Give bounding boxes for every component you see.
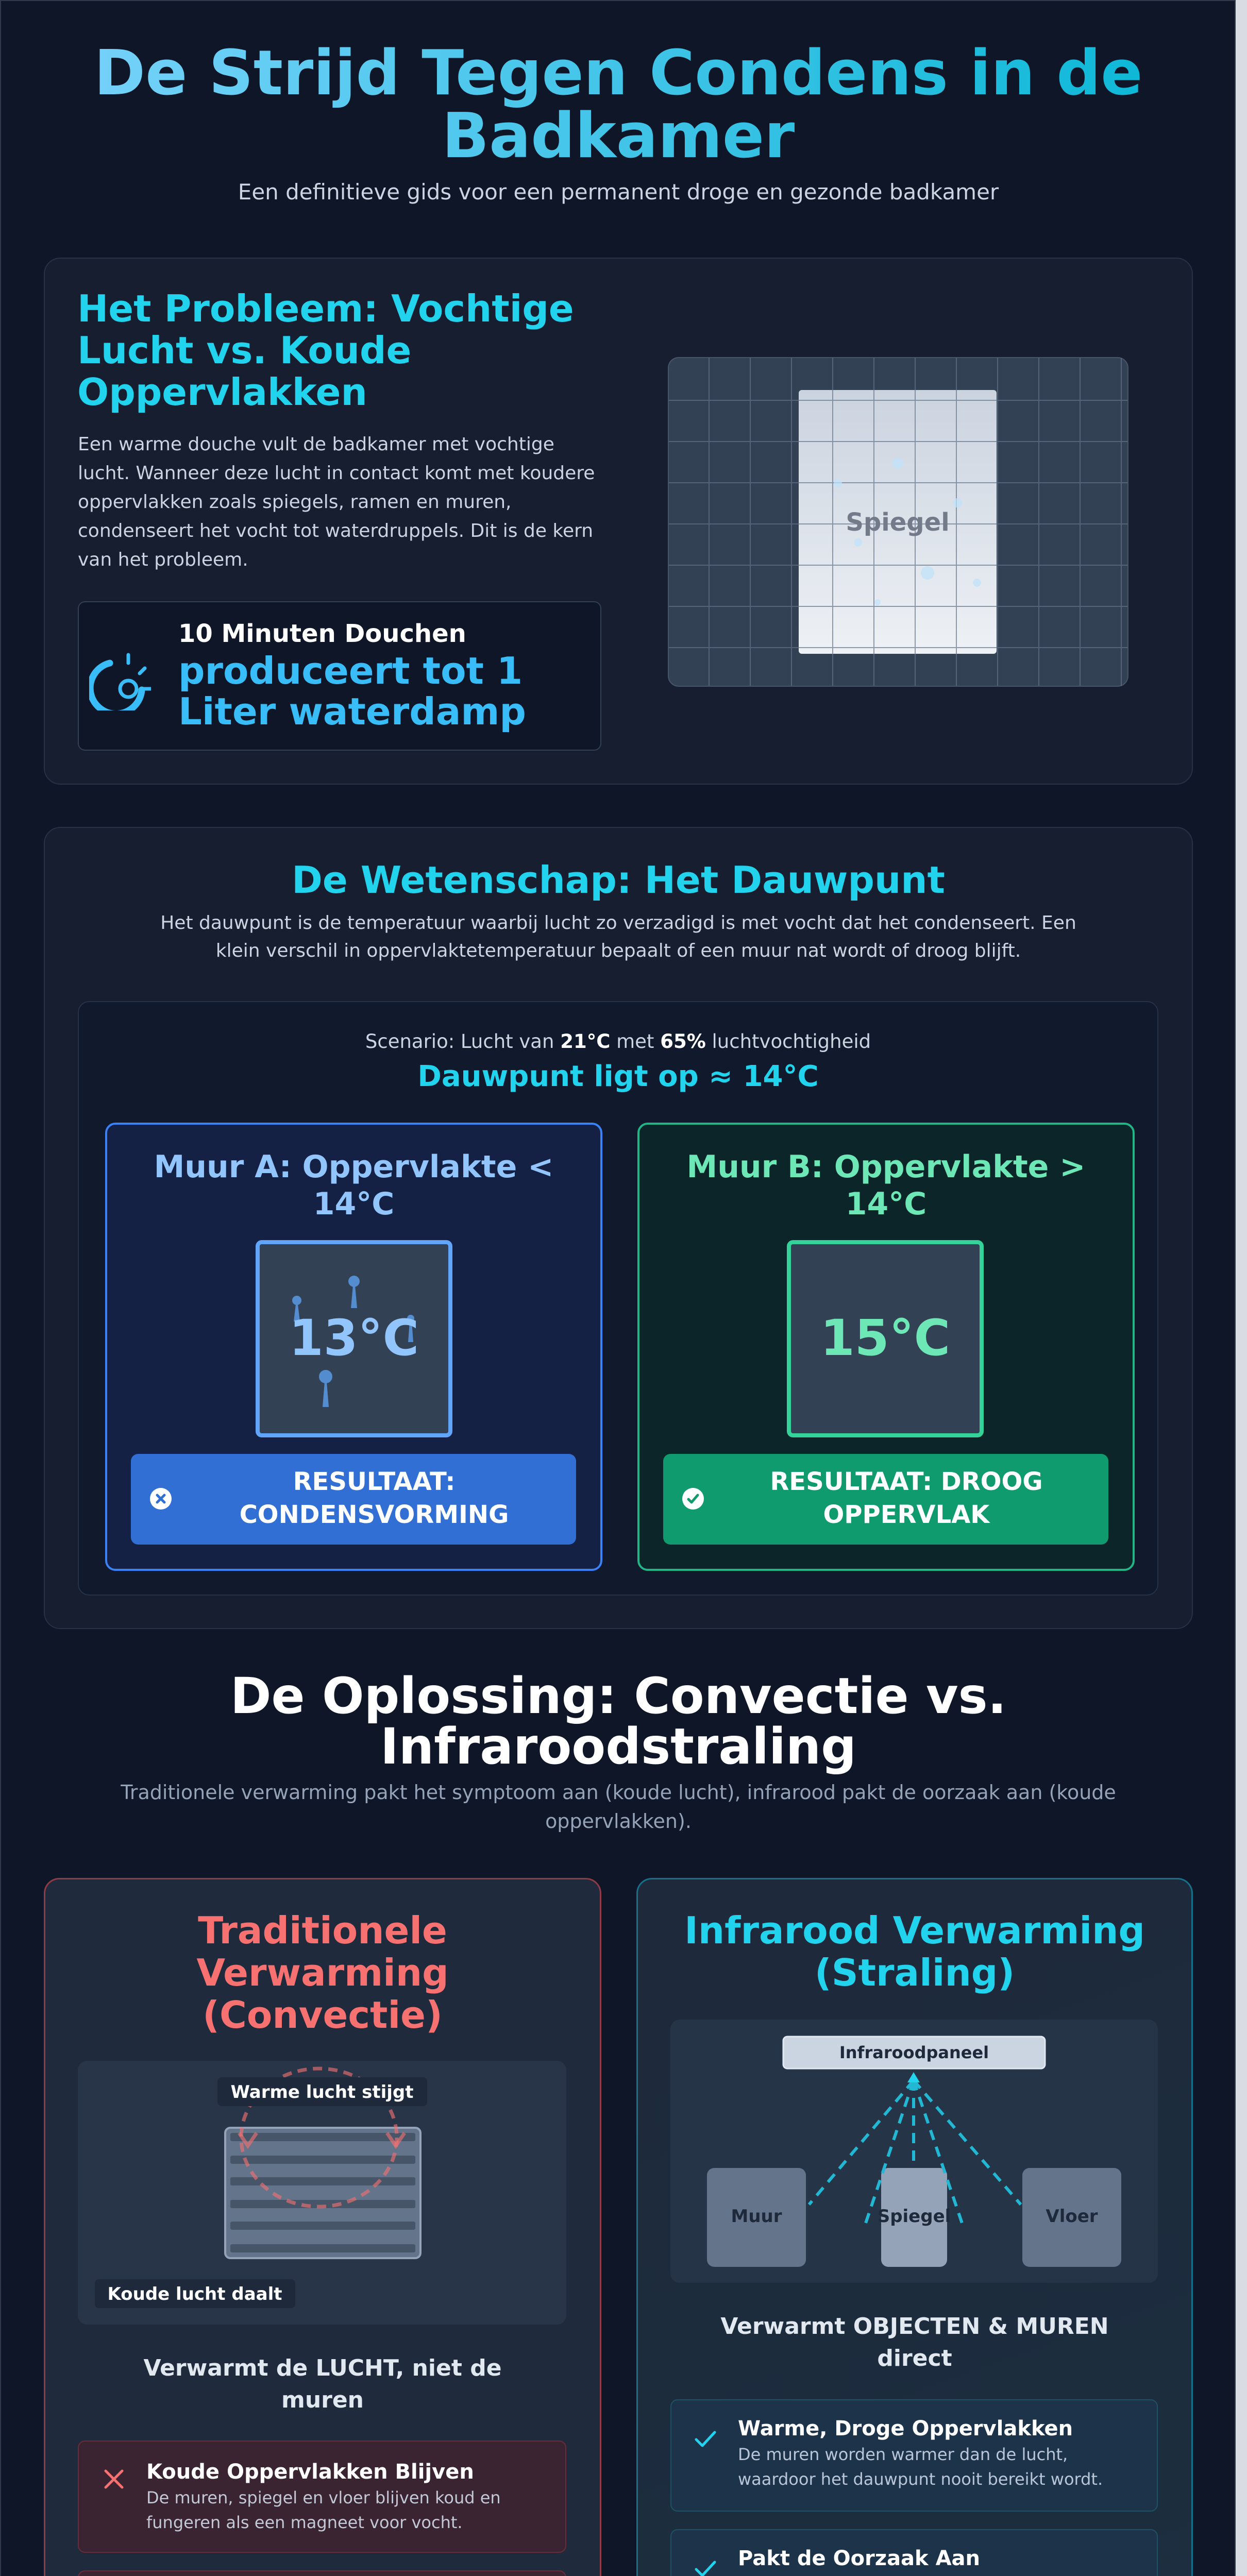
diagram: straling: Infraroodpaneel — [839, 2043, 989, 2062]
illustration: mirror on tiles: Spiegel — [846, 508, 950, 537]
card title A — [154, 1149, 553, 1222]
diagram: convectie: Koude lucht daalt — [107, 2284, 282, 2304]
heading: oplossing — [230, 1667, 1006, 1775]
objects — [707, 2168, 806, 2267]
title: traditioneel: Traditionele — [198, 1909, 447, 1952]
result text A: CONDENSVORMING — [240, 1500, 509, 1529]
caption: objecten: Verwarmt OBJECTEN & MUREN — [720, 2313, 1109, 2340]
item: warme oppervlakken: Warme, Droge Oppervlakken — [738, 2417, 1073, 2441]
subtitle: oplossing: oppervlakken). — [545, 1810, 692, 1833]
item: warme oppervlakken: De muren worden warmer dan de lucht, — [738, 2445, 1068, 2464]
icon: check — [695, 2431, 716, 2447]
dauwpunt value: Dauwpunt ligt op ≈ 14°C — [417, 1060, 819, 1093]
item: luchtcirculatie — [78, 2570, 566, 2576]
subtitle: Een definitieve gids voor een permanent droge en gezonde badkamer — [238, 179, 999, 205]
caption: lucht: Verwarmt de LUCHT, niet de — [143, 2355, 502, 2381]
rays — [809, 2080, 1021, 2225]
caption: lucht — [143, 2355, 502, 2413]
result text B — [770, 1467, 1043, 1529]
icon: check — [695, 2561, 716, 2576]
wall square A with droplets — [256, 1240, 452, 1437]
icon: shower timer — [89, 653, 151, 710]
title: Badkamer — [442, 100, 795, 172]
result B — [663, 1454, 1108, 1545]
title: traditioneel: (Convectie) — [203, 1993, 443, 2037]
illustration: mirror on tiles — [668, 357, 1128, 687]
heading: dauwpunt: De Wetenschap: Het Dauwpunt — [292, 858, 945, 902]
text: probleem uitleg: Een warme douche vult de badkamer met vochtige — [78, 434, 554, 455]
diagram: straling — [670, 2020, 1158, 2283]
card: Muur B — [637, 1123, 1135, 1571]
subtitle: oplossing: Traditionele verwarming pakt het symptoom aan (koude lucht), infrarood pakt de oorzaak aan (koude — [121, 1781, 1116, 1804]
title: infrarood: Infrarood Verwarming — [684, 1909, 1145, 1952]
card title B: Muur B: Oppervlakte > — [686, 1149, 1086, 1185]
panel: probleem — [44, 258, 1193, 785]
title: traditioneel: Verwarming — [196, 1951, 449, 1994]
radiator — [225, 2128, 420, 2258]
text: probleem uitleg: oppervlakken zoals spiegels, ramen en muren, — [78, 492, 511, 513]
icon: x — [104, 2470, 124, 2488]
stat value — [178, 649, 526, 733]
item: warme oppervlakken: waardoor het dauwpunt nooit bereikt wordt. — [738, 2469, 1103, 2489]
label warm — [217, 2077, 427, 2106]
temperature A: 13°C — [289, 1309, 419, 1367]
item: warme oppervlakken — [670, 2399, 1158, 2512]
item: koude oppervlakken: De muren, spiegel en vloer blijven koud en — [146, 2488, 501, 2507]
result text B: OPPERVLAK — [823, 1500, 989, 1529]
item: koude oppervlakken — [78, 2441, 566, 2553]
caption: objecten: direct — [877, 2345, 952, 2371]
item: oorzaak: Pakt de Oorzaak Aan — [738, 2547, 980, 2570]
title: De Strijd Tegen Condens in de — [94, 38, 1142, 109]
convection loop — [241, 2069, 397, 2207]
result text B: RESULTAAT: DROOG — [770, 1467, 1043, 1496]
item: koude oppervlakken: fungeren als een magneet voor vocht. — [146, 2513, 463, 2532]
heading: oplossing: Infraroodstraling — [380, 1718, 856, 1775]
title — [0, 42, 1237, 168]
caption: objecten — [720, 2313, 1109, 2371]
stat value: produceert tot 1 — [178, 649, 523, 692]
title: infrarood: (Straling) — [815, 1951, 1015, 1994]
result text A — [240, 1467, 509, 1529]
subtitle: oplossing — [121, 1781, 1116, 1833]
temperature B: 15°C — [820, 1309, 950, 1367]
text: probleem uitleg — [78, 434, 595, 570]
text: uitleg dauwpunt — [160, 912, 1076, 961]
text: probleem uitleg: condenseert het vocht tot waterdruppels. Dit is de kern — [78, 520, 593, 541]
heading: probleem: Oppervlakken — [77, 370, 367, 414]
text: probleem uitleg: lucht. Wanneer deze lucht in contact komt met koudere — [78, 463, 595, 484]
diagram: straling: Spiegel — [878, 2206, 951, 2227]
stat label: 10 Minuten Douchen — [178, 619, 466, 648]
stat value: Liter waterdamp — [178, 690, 526, 733]
item: koude oppervlakken: Koude Oppervlakken Blijven — [146, 2460, 474, 2484]
card title A: Muur A: Oppervlakte < — [154, 1149, 553, 1185]
panel: traditionele verwarming — [44, 1878, 601, 2576]
title: traditioneel — [196, 1909, 449, 2037]
text: uitleg dauwpunt: Het dauwpunt is de temperatuur waarbij lucht zo verzadigd is met vocht dat het condenseert. Een — [160, 912, 1076, 934]
panel: wetenschap — [44, 827, 1193, 1629]
result A — [131, 1454, 576, 1545]
diagram: straling: Vloer — [1046, 2206, 1098, 2227]
wall square B — [787, 1240, 984, 1437]
heading: probleem: Het Probleem: Vochtige — [77, 287, 574, 330]
card title B — [686, 1149, 1086, 1222]
diagram: convectie: Warme lucht stijgt — [230, 2082, 414, 2103]
label koud — [95, 2279, 295, 2308]
caption: lucht: muren — [281, 2387, 364, 2413]
heading: probleem — [77, 287, 574, 414]
item: oorzaak — [670, 2529, 1158, 2576]
title: infrarood — [684, 1909, 1145, 1994]
icon: x circle — [150, 1488, 172, 1510]
text: probleem uitleg: van het probleem. — [78, 549, 248, 570]
heading: oplossing: De Oplossing: Convectie vs. — [230, 1667, 1006, 1725]
diagram: convectie — [78, 2061, 566, 2325]
icon: check circle — [682, 1488, 704, 1510]
panel: infrarood verwarming — [636, 1878, 1193, 2576]
stat box — [78, 601, 601, 751]
card title B: 14°C — [846, 1186, 926, 1222]
result text A: RESULTAAT: — [293, 1467, 455, 1496]
scenario line: Scenario: Lucht van 21°C met 65% luchtvochtigheid — [365, 1030, 871, 1053]
card title A: 14°C — [313, 1186, 394, 1222]
diagram: straling: Muur — [731, 2206, 782, 2227]
scenario box — [78, 1001, 1158, 1596]
card: Muur A — [105, 1123, 602, 1571]
heading: probleem: Lucht vs. Koude — [77, 329, 411, 372]
panel box — [783, 2037, 1045, 2069]
text: uitleg dauwpunt: klein verschil in oppervlaktetemperatuur bepaalt of een muur nat wordt of droog blijft. — [216, 940, 1021, 961]
